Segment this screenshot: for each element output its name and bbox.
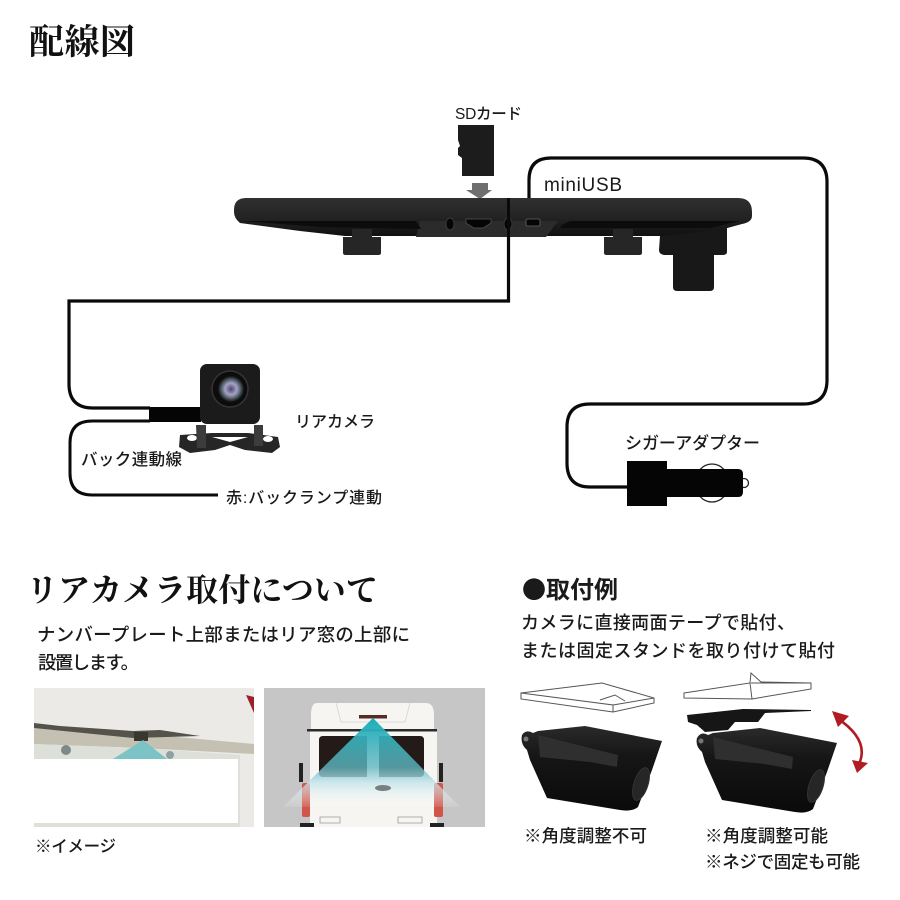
port: mini USB [526, 219, 540, 226]
connector block [149, 407, 201, 422]
label: red reverse lamp link: 赤:バックランプ連動 [226, 489, 382, 507]
caption: angle adjustable and screw fixing: ※ネジで固定も可能 [705, 852, 860, 872]
cable: mini USB to cigar adapter [529, 158, 827, 487]
label: miniUSB: miniUSB [544, 175, 622, 196]
caption: angle not adjustable: ※角度調整不可 [524, 826, 647, 846]
title: wiring diagram: 配線図 [29, 23, 135, 62]
right groove [560, 221, 740, 228]
text: mounting location: 設置します。 [38, 652, 139, 673]
camera face highlight [538, 735, 618, 767]
dark edge [34, 723, 200, 738]
text: mounting description: カメラに直接両面テープで貼付、 [521, 613, 795, 633]
caption: image only: ※イメージ [35, 838, 116, 856]
icon: insert arrow [466, 183, 492, 199]
photo: license plate mount [34, 688, 254, 827]
lens [629, 766, 653, 802]
camera face highlight [713, 737, 793, 769]
caption: angle adjustable and screw fixing: ※角度調整可能 [705, 826, 828, 846]
taillight left [302, 783, 310, 817]
high mount light [359, 715, 387, 718]
lens glass [218, 376, 244, 402]
diagram: stand mount [684, 673, 837, 813]
photo background [34, 688, 254, 827]
arrow: adjustable angle [832, 711, 868, 773]
bumper left [300, 823, 314, 827]
right clip [604, 229, 642, 255]
camera body [522, 726, 662, 811]
mount [659, 226, 727, 291]
cigar adapter [627, 461, 748, 506]
port: SD slot [466, 219, 491, 228]
adapter body [627, 461, 743, 506]
roof panels [336, 703, 410, 722]
mirror left [299, 763, 303, 782]
heading: about rear camera mounting: リアカメラ取付について [26, 572, 378, 608]
left clip [343, 229, 381, 255]
left groove [242, 221, 421, 229]
label: rear camera: リアカメラ [295, 413, 375, 431]
bumper right [430, 823, 444, 827]
taillight right [434, 783, 443, 817]
text: mounting description: または固定スタンドを取り付けて貼付 [521, 641, 835, 661]
port: audio jack [446, 218, 454, 230]
plate bolts [61, 745, 71, 755]
cable: reverse link wire [70, 421, 218, 495]
mirror body [234, 198, 752, 236]
port: AV jack [504, 218, 512, 230]
plate area [34, 744, 240, 827]
door handle [375, 785, 391, 791]
label: SD card: SDカード [455, 105, 522, 123]
photo: van rear view [264, 688, 485, 827]
arrowhead top [832, 711, 849, 727]
rear camera [149, 364, 280, 453]
camera housing [200, 364, 260, 424]
plate bolt [166, 751, 174, 759]
masking box [34, 759, 238, 823]
bracket arms [196, 425, 263, 448]
text: mounting location: ナンバープレート上部またはリア窓の上部に [37, 624, 410, 645]
camera on trunk [134, 732, 148, 741]
adapter ring [695, 464, 729, 502]
heading: mounting example: ●取付例 [522, 570, 618, 605]
photo background [264, 688, 485, 827]
arrowhead bottom [852, 760, 868, 773]
tail light [246, 695, 254, 713]
lens [804, 768, 828, 804]
rear windows [319, 736, 424, 777]
mirror monitor [234, 198, 752, 291]
camera body [697, 728, 837, 813]
lens ring [212, 371, 248, 407]
view cone [283, 718, 460, 807]
cable: mirror to rear camera [69, 199, 508, 408]
label: reverse link wire: バック連動線 [81, 450, 182, 469]
van body [310, 703, 437, 827]
bracket [179, 433, 280, 453]
port panel [416, 221, 558, 237]
trunk band [34, 727, 254, 754]
view cone [113, 740, 167, 759]
camera ear hole [698, 738, 704, 744]
adapter tip [740, 478, 748, 488]
diagram: direct tape mount [521, 683, 662, 811]
surface plate [521, 683, 654, 712]
roof strip [307, 729, 437, 732]
label: cigar adapter: シガーアダプター [625, 433, 760, 453]
icon: micro SD card [458, 125, 494, 176]
camera ear hole [524, 736, 528, 742]
arc [837, 718, 862, 764]
surface plate [684, 673, 811, 699]
bracket [687, 709, 811, 732]
mirror right [439, 763, 443, 782]
plates [320, 817, 422, 823]
cable over mirror port [507, 198, 510, 262]
